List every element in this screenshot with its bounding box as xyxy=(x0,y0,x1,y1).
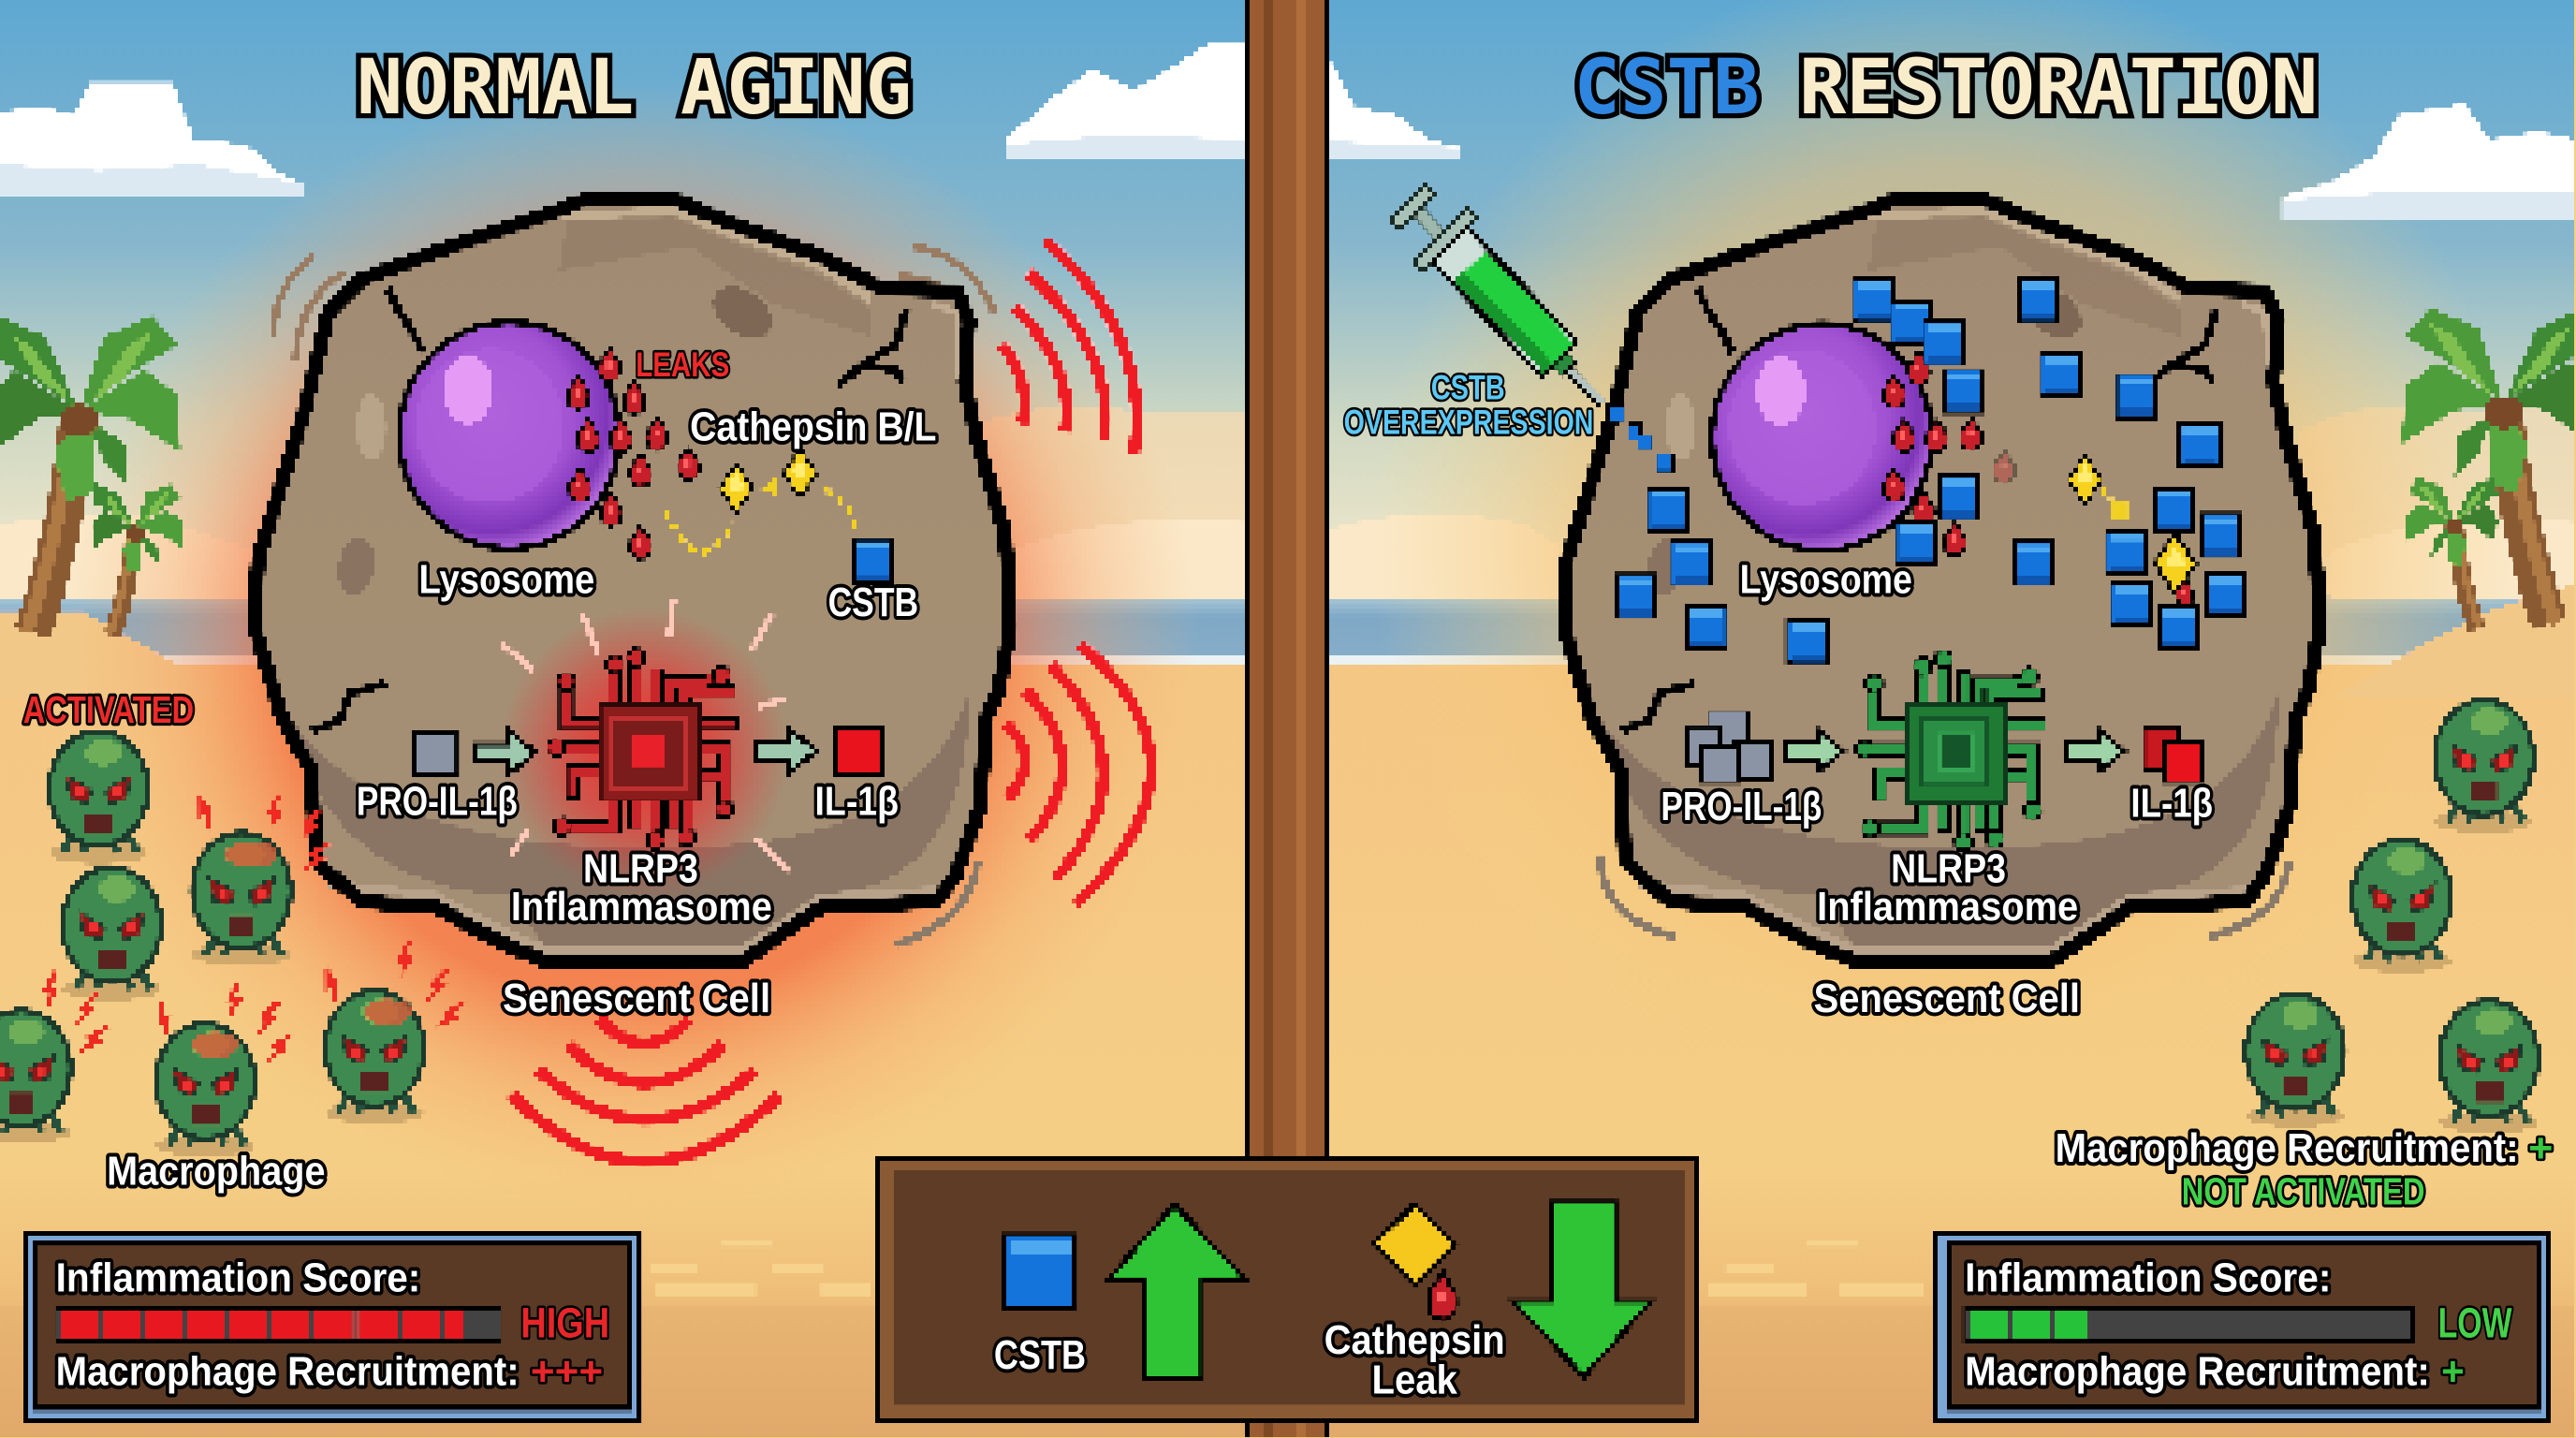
score text right: LOW xyxy=(2438,1299,2512,1347)
legend labels: CSTB xyxy=(994,1332,1086,1378)
label: CSTB overexpression: OVEREXPRESSION xyxy=(1344,403,1593,441)
label: NLRP3 inflammasome left: Inflammasome xyxy=(511,884,772,930)
IL-1β block left xyxy=(835,729,882,774)
PRO-IL-1β block left xyxy=(416,731,459,774)
lysosome left xyxy=(399,322,620,549)
title: CSTB restoration: RESTORATION xyxy=(1799,44,2318,132)
label: cathepsin B/L: Cathepsin B/L xyxy=(690,404,936,449)
label: NLRP3 inflammasome right: Inflammasome xyxy=(1817,884,2078,930)
clouds xyxy=(0,44,2576,218)
cathepsin diamonds and path xyxy=(666,448,855,552)
panel: inflammation score left xyxy=(24,1232,640,1419)
cell tremble marks right xyxy=(1600,855,2289,936)
CSTB block left xyxy=(853,539,892,581)
diamond neutralised by CSTB xyxy=(2155,533,2196,605)
label: NLRP3 inflammasome left xyxy=(511,845,772,930)
arrow right 2 xyxy=(2065,729,2124,772)
label: IL-1β left: IL-1β xyxy=(815,779,899,825)
title: CSTB restoration: CSTB xyxy=(1573,44,1760,132)
label: CSTB left: CSTB xyxy=(828,580,918,625)
red inflammation waves: lower right xyxy=(1005,644,1150,903)
PRO-IL-1β cluster right xyxy=(1687,712,1771,782)
label: PRO-IL-1β left: PRO-IL-1β xyxy=(357,779,518,825)
label: lysosome left: Lysosome xyxy=(419,557,594,603)
score text left: Inflammation Score: xyxy=(56,1255,420,1301)
background: beach right panel xyxy=(1288,0,2576,1438)
macrophages calm xyxy=(2246,700,2539,1134)
legend labels: Cathepsin xyxy=(1325,1317,1505,1363)
arrow left 1 xyxy=(476,731,535,774)
arrow: leak down xyxy=(1513,1203,1651,1377)
label: leaks: LEAKS xyxy=(636,345,729,384)
score text right: + xyxy=(2441,1349,2465,1395)
panel: summary legend xyxy=(879,1157,1697,1419)
palm trees right xyxy=(2402,307,2576,629)
label: lysosome right: Lysosome xyxy=(1740,557,1912,603)
legend labels: Leak xyxy=(1372,1357,1457,1402)
wooden divider post xyxy=(1245,0,1329,1438)
label: activated: ACTIVATED xyxy=(23,688,194,731)
score text right: Inflammation Score: xyxy=(1965,1255,2331,1301)
score text right xyxy=(1965,1255,2512,1395)
label: not activated: NOT ACTIVATED xyxy=(2182,1169,2425,1212)
red inflammation waves: upper right xyxy=(1003,240,1136,455)
lysosome right xyxy=(1712,324,1932,550)
label: NLRP3 inflammasome left: NLRP3 xyxy=(583,845,698,891)
label: CSTB overexpression: CSTB xyxy=(1431,368,1505,406)
activation sparks xyxy=(43,791,470,1070)
legend labels xyxy=(994,1317,1505,1402)
label: PRO-IL-1β right: PRO-IL-1β xyxy=(1661,784,1822,829)
label: NLRP3 inflammasome right: NLRP3 xyxy=(1891,845,2006,891)
background: beach left panel xyxy=(0,0,1288,1438)
title: normal aging: NORMAL AGING xyxy=(357,44,912,132)
title: CSTB restoration xyxy=(1573,44,2318,132)
label: macrophage recruitment callout: + xyxy=(2528,1125,2553,1171)
red inflammation waves: bottom xyxy=(511,1019,781,1162)
IL-1β blocks right xyxy=(2144,726,2203,782)
small CSTB stream from needle xyxy=(1608,404,1673,472)
label: macrophage: Macrophage xyxy=(107,1148,326,1194)
score text left xyxy=(56,1255,609,1395)
palm trees left xyxy=(0,315,183,636)
label: senescent cell right: Senescent Cell xyxy=(1814,976,2080,1021)
icon: syringe xyxy=(1381,176,1630,430)
macrophages activated xyxy=(0,731,424,1157)
cathepsin leak drops left xyxy=(568,348,699,559)
cathepsin diamonds right xyxy=(2069,455,2128,521)
senescent cell: normal aging xyxy=(255,198,1010,961)
label: senescent cell left: Senescent Cell xyxy=(503,976,770,1021)
CSTB blocks scattered xyxy=(1617,279,2246,664)
NLRP3 inflammasome active xyxy=(500,600,788,897)
panel: inflammation score right xyxy=(1937,1232,2550,1419)
score text left: Macrophage Recruitment: xyxy=(56,1349,520,1395)
icon: cathepsin diamond with leak xyxy=(1373,1204,1456,1320)
icon: CSTB large block xyxy=(1005,1236,1076,1308)
senescent cell: CSTB restoration xyxy=(1564,198,2320,961)
label: IL-1β right: IL-1β xyxy=(2130,780,2213,826)
score text left: +++ xyxy=(531,1349,603,1395)
cell tremble marks left xyxy=(274,246,994,945)
label: NLRP3 inflammasome right xyxy=(1817,845,2078,930)
arrow: CSTB up xyxy=(1109,1204,1244,1377)
arrow left 2 xyxy=(757,729,816,772)
arrow right 1 xyxy=(1784,729,1843,772)
score text right: Macrophage Recruitment: xyxy=(1965,1349,2430,1395)
label: macrophage recruitment callout: Macrophage Recruitment: xyxy=(2056,1125,2519,1171)
NLRP3 inflammasome quiet xyxy=(1855,651,2042,851)
reduced cathepsin drops right xyxy=(1883,352,2014,555)
score text left: HIGH xyxy=(520,1299,609,1347)
label: CSTB overexpression xyxy=(1344,368,1593,441)
